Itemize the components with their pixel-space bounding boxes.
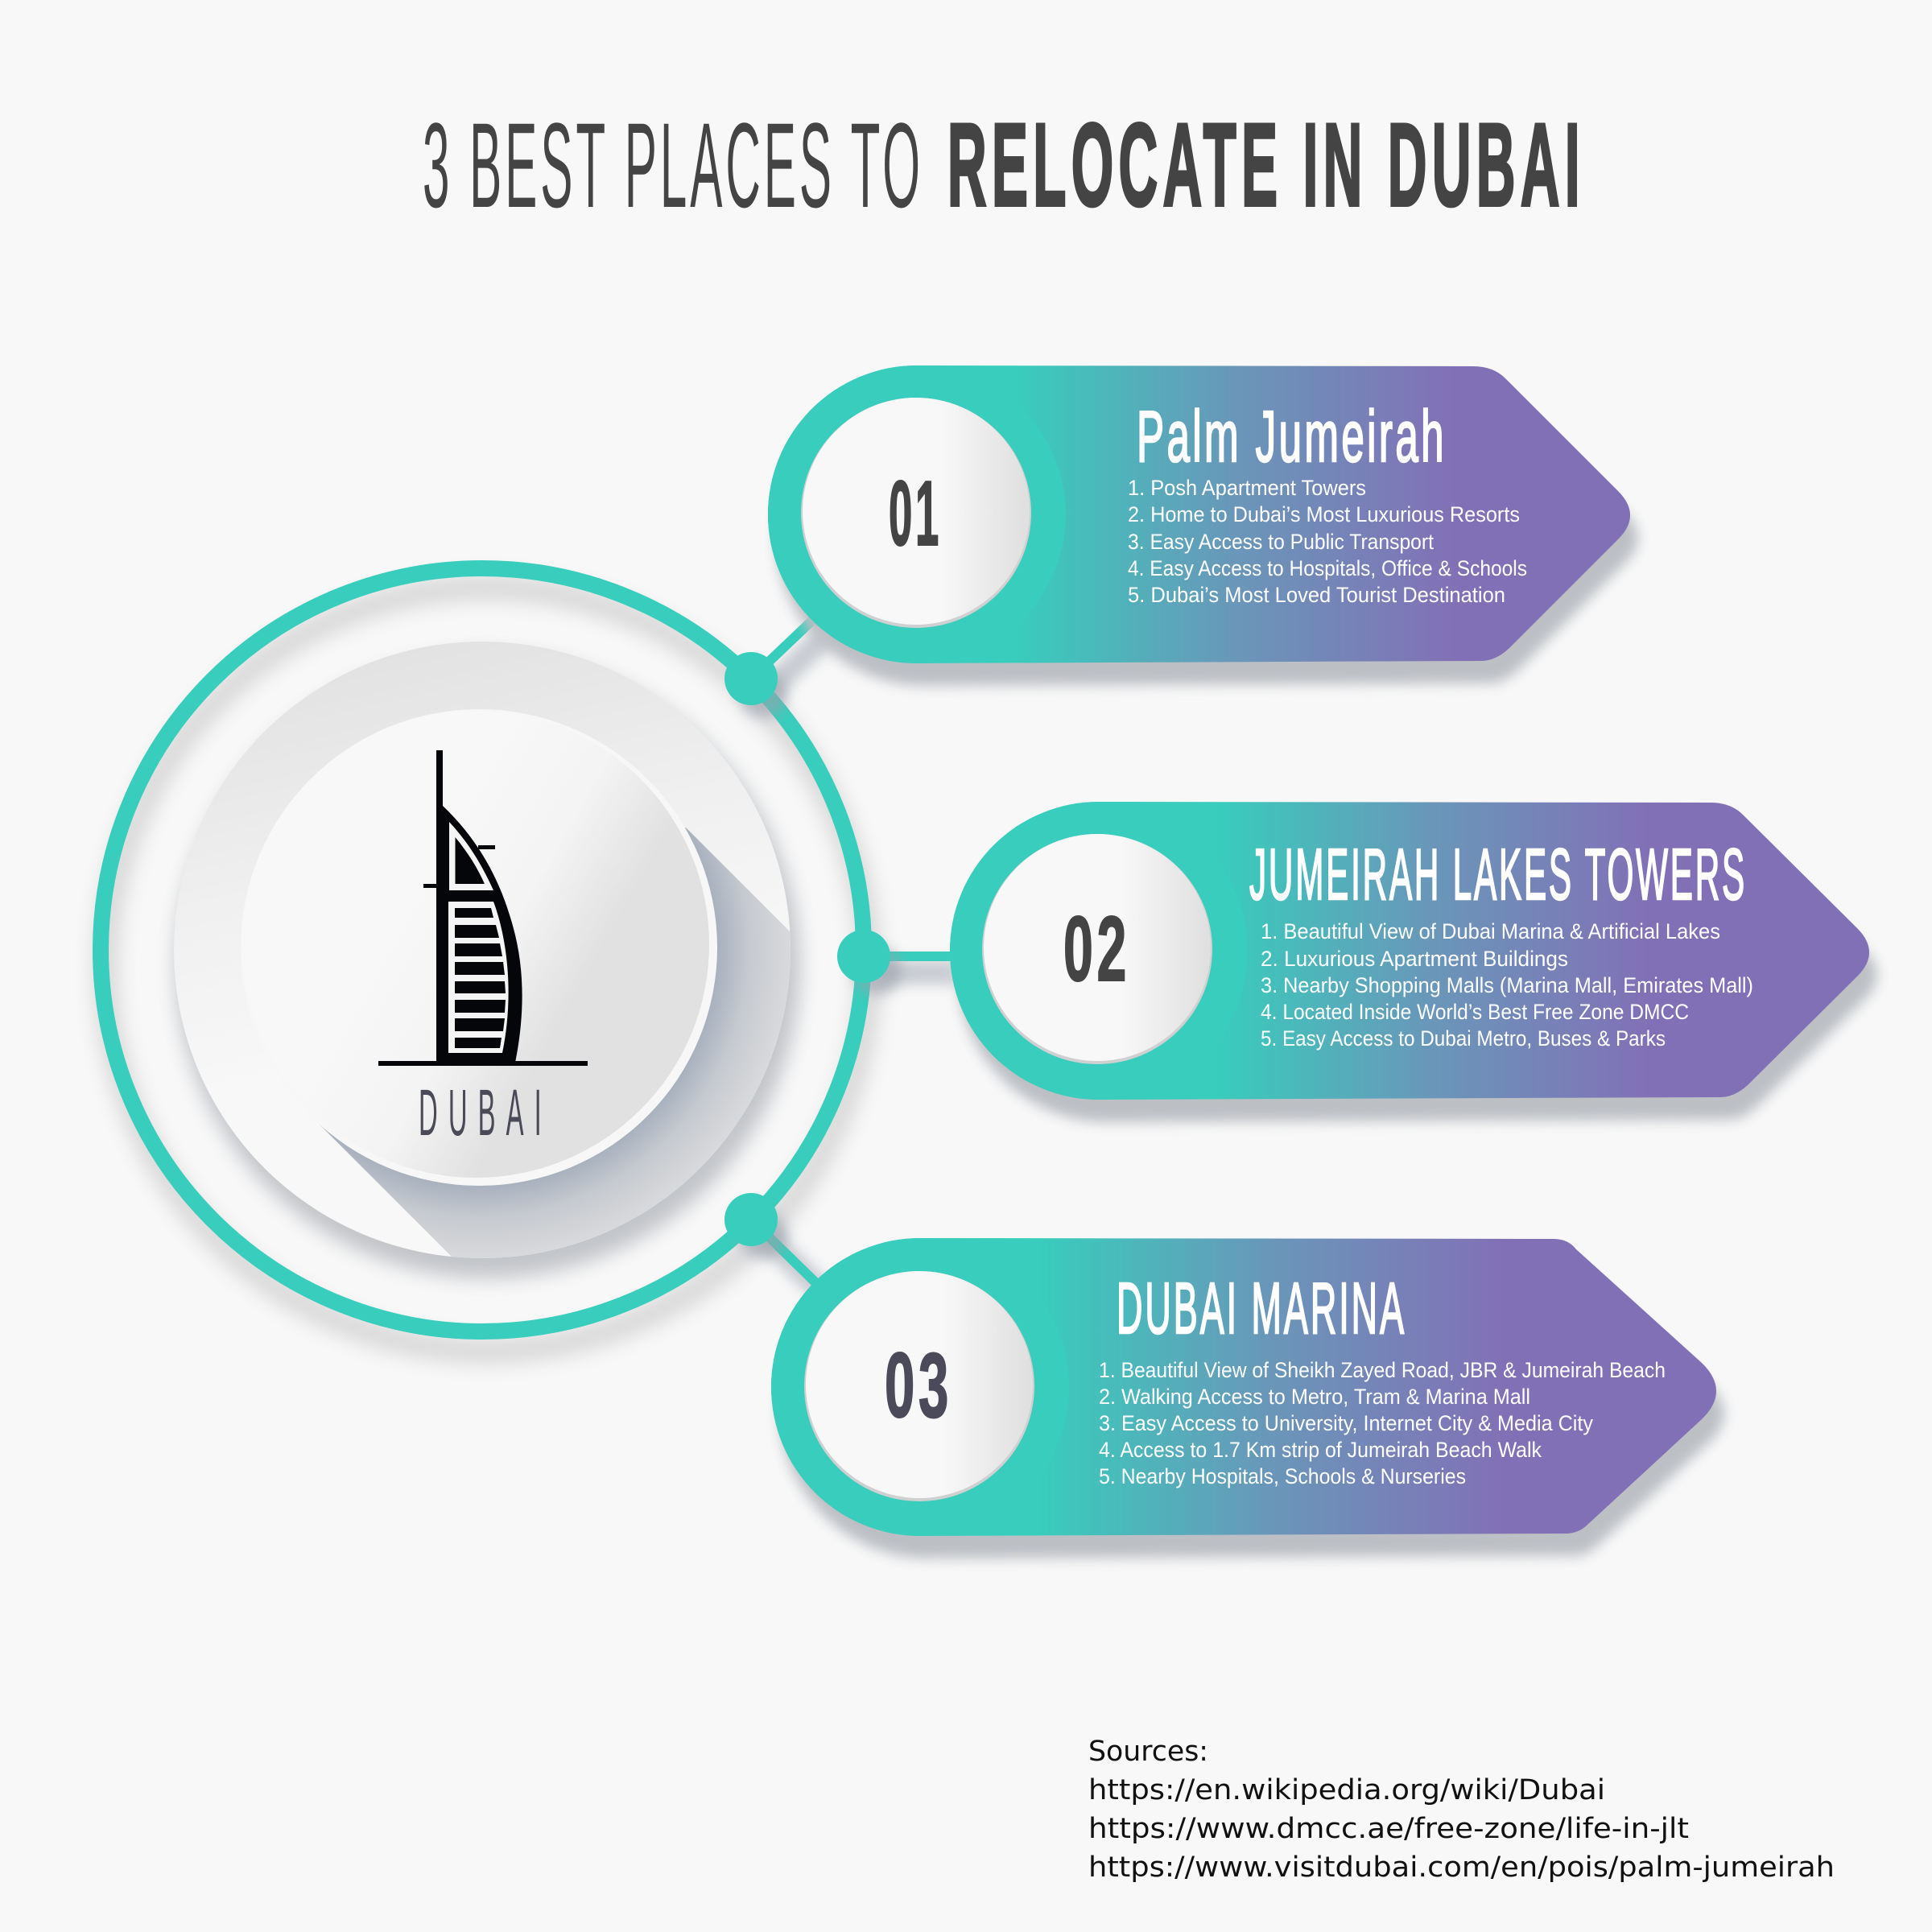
heading: Palm Jumeirah [1137,397,1447,477]
title: 3 BEST PLACES TO [423,97,923,233]
list: 3. Easy Access to University, Internet City & Media City [1099,1411,1593,1435]
banner [771,1238,1716,1536]
panel: 03 Dubai Marina [771,1238,1724,1558]
list: 4. Easy Access to Hospitals, Office & Schools [1128,556,1527,580]
panel: 03 Dubai Marina: DUBAI MARINA [1117,1269,1406,1349]
disc shadow [175,654,800,1278]
panel: central Dubai hub [101,568,958,1368]
sources: https://www.dmcc.ae/free-zone/life-in-jlt [1088,1813,1689,1845]
number: 03 [885,1335,952,1437]
list [1099,1358,1666,1488]
banner shadow [776,388,1638,686]
banner [950,802,1869,1100]
ring shadow [105,588,869,1351]
list: 1. Posh Apartment Towers [1128,476,1366,500]
number circle [982,834,1212,1064]
number: 02 [1063,898,1130,1001]
list: 3. Easy Access to Public Transport [1128,530,1434,554]
number circle [801,398,1031,628]
list: 1. Beautiful View of Sheikh Zayed Road, JBR & Jumeirah Beach [1099,1358,1666,1382]
outer ring [101,568,864,1331]
list [1128,476,1527,607]
banner shadow [958,824,1877,1122]
panel: 02 Jumeirah Lakes Towers [950,802,1877,1122]
sources [1088,1736,1835,1884]
list [1261,919,1753,1051]
list: 2. Home to Dubai’s Most Luxurious Resorts [1128,502,1520,526]
sources: Sources: [1088,1736,1208,1768]
list: 3. Nearby Shopping Malls (Marina Mall, Emirates Mall) [1261,973,1753,997]
list: 2. Luxurious Apartment Buildings [1261,947,1568,971]
sources: https://en.wikipedia.org/wiki/Dubai [1088,1774,1605,1806]
list: 4. Access to 1.7 Km strip of Jumeirah Beach Walk [1099,1438,1542,1462]
list: 2. Walking Access to Metro, Tram & Marina Mall [1099,1385,1530,1409]
list: 5. Easy Access to Dubai Metro, Buses & Parks [1261,1026,1666,1051]
node dots [724,652,902,1259]
list: 1. Beautiful View of Dubai Marina & Artificial Lakes [1261,919,1720,943]
grey disc [174,642,791,1258]
connector lines [751,616,958,1302]
sources: https://www.visitdubai.com/en/pois/palm-jumeirah [1088,1852,1835,1884]
banner shadow [779,1261,1724,1558]
list: 5. Dubai’s Most Loved Tourist Destination [1128,583,1505,607]
list: 4. Located Inside World’s Best Free Zone DMCC [1261,1000,1689,1024]
list: 5. Nearby Hospitals, Schools & Nurseries [1099,1464,1466,1488]
panel: 01 Palm Jumeirah: 01 [889,463,942,565]
long shadow [320,828,791,1258]
banner [768,365,1630,663]
number circle [804,1271,1034,1501]
inner circle [241,709,717,1186]
panel: 01 Palm Jumeirah [768,365,1638,686]
Dubai label: DUBAI [419,1075,542,1150]
icon: Burj Al Arab [378,750,588,1066]
